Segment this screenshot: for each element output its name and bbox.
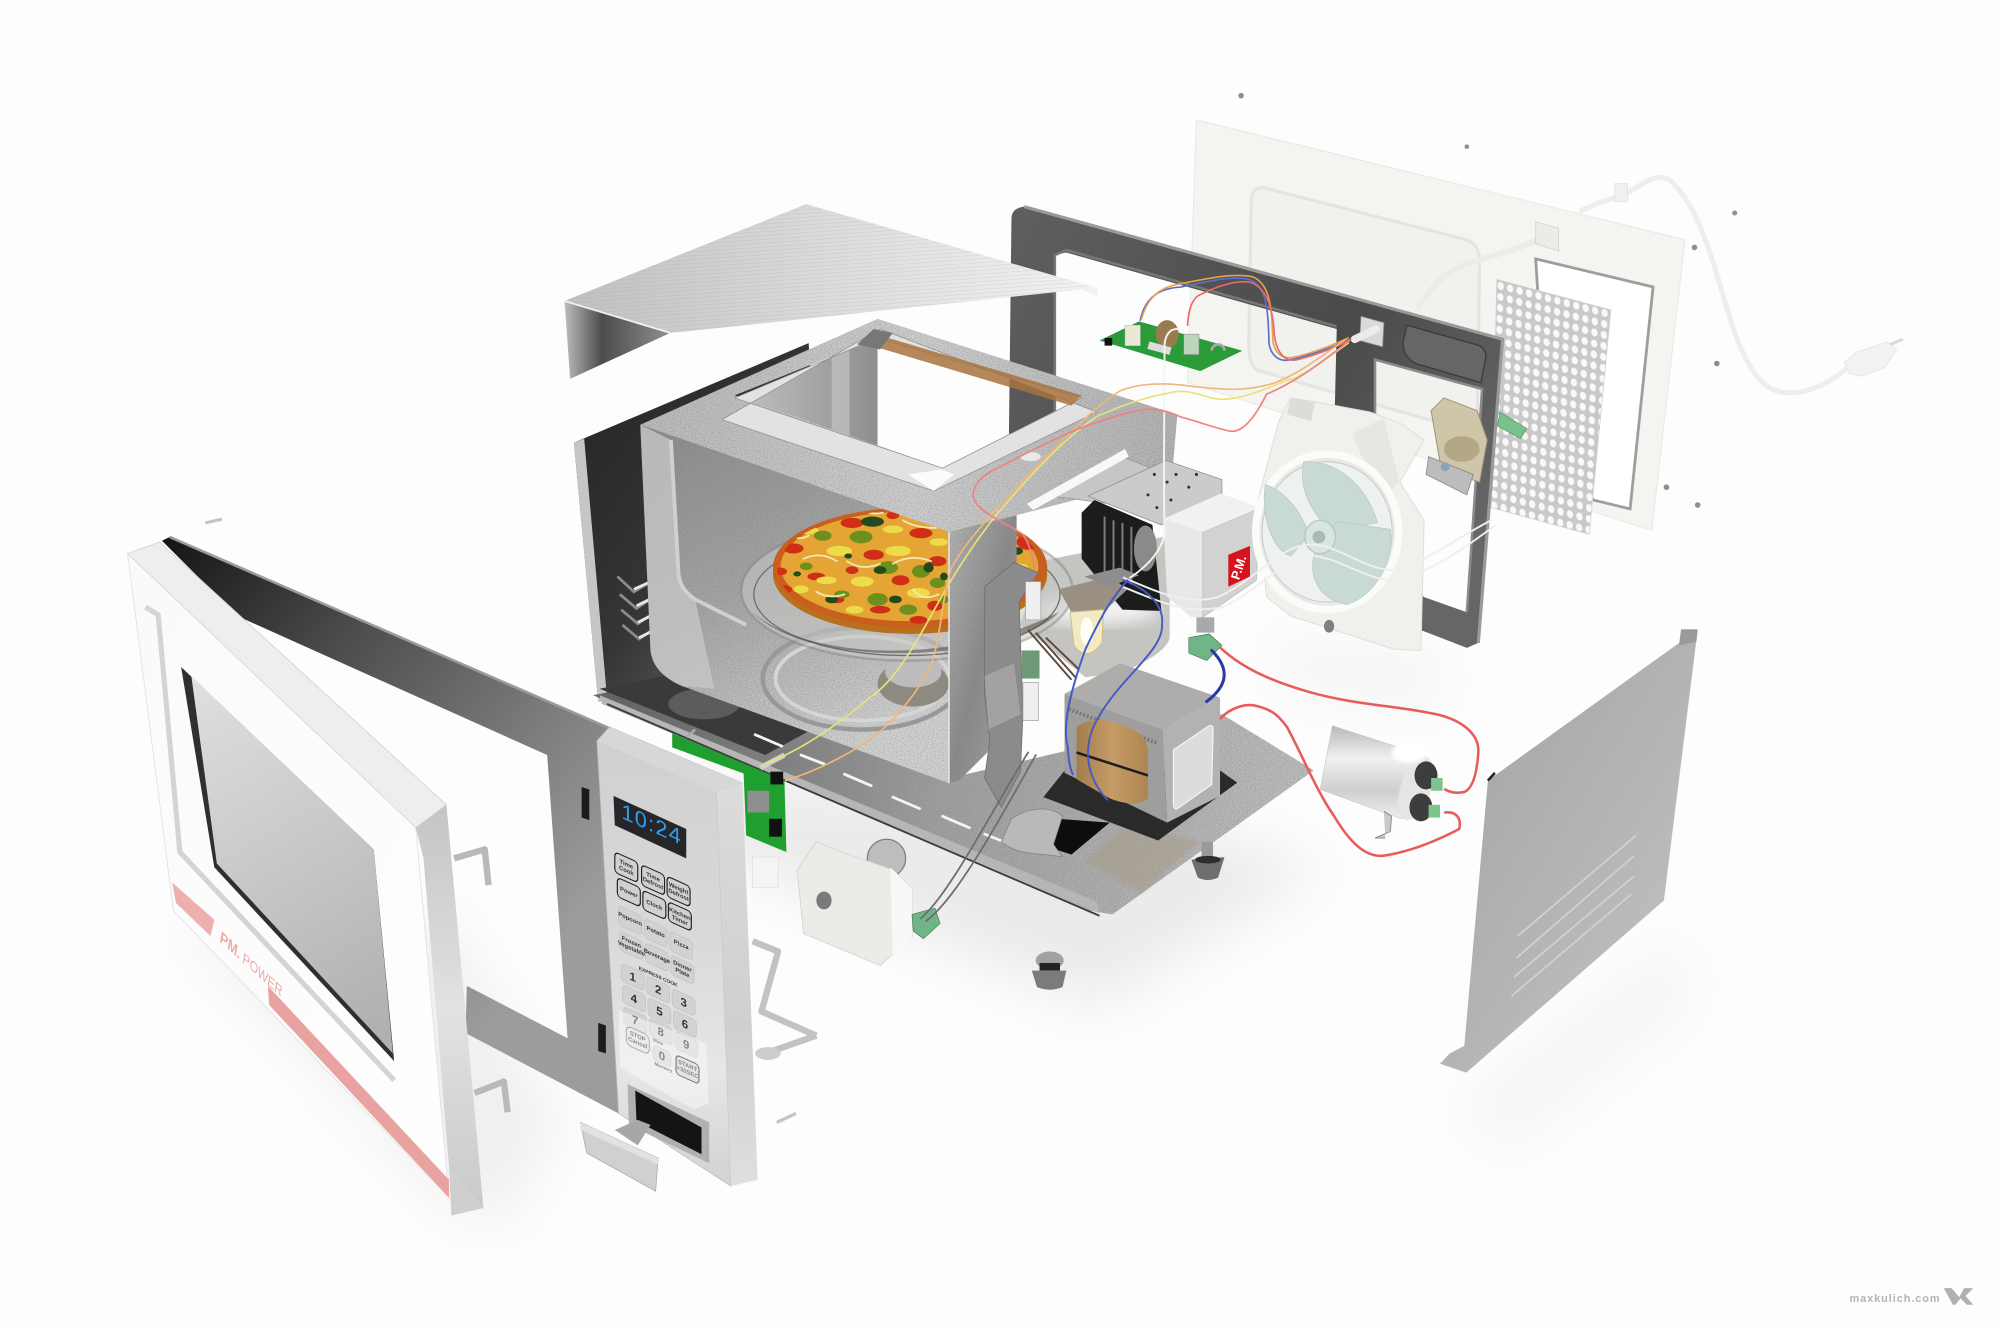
cabinet rear wall — [574, 343, 829, 701]
panel vent ribs — [1511, 835, 1636, 996]
embossed recess — [1249, 187, 1480, 434]
motor connector — [912, 908, 940, 939]
keypad: 8 — [658, 1024, 664, 1040]
tray slots — [755, 735, 1010, 844]
power cord and plug — [1418, 177, 1903, 393]
oven lamp — [1059, 568, 1139, 654]
keypad: Time — [619, 858, 634, 871]
thermal fuse — [1015, 452, 1048, 467]
feet — [1032, 842, 1224, 990]
door pink bands — [172, 883, 214, 936]
keypad: Kitchen — [669, 906, 691, 923]
fan shroud — [1256, 398, 1424, 650]
motor connector — [1497, 412, 1527, 439]
door window — [181, 667, 394, 1061]
fan motor — [1426, 398, 1527, 495]
keypad: Time — [646, 871, 660, 884]
keypad: Popcorn — [618, 911, 642, 928]
control panel — [580, 727, 758, 1191]
keypad: Clock — [646, 898, 663, 913]
keypad: Beverage — [644, 947, 671, 966]
door front — [128, 542, 483, 1215]
watermark — [1849, 1288, 1973, 1305]
cord grommet — [1360, 316, 1384, 347]
door logo: PM. — [219, 928, 242, 963]
vent window — [1536, 259, 1653, 509]
keypad: Mute — [653, 1037, 664, 1047]
wall vent slots — [617, 576, 652, 639]
keypad — [615, 852, 699, 1084]
door window bevel — [145, 607, 394, 1080]
perforated mesh — [1491, 279, 1611, 534]
door logo: POWER — [242, 949, 284, 1000]
control circuit board — [672, 730, 786, 852]
door handle opening — [628, 1084, 709, 1163]
keypad: Power — [620, 885, 638, 900]
digital time readout: 10:24 — [621, 798, 682, 850]
turntable roller ring — [763, 628, 962, 730]
watermark: maxkulich.com — [1849, 1293, 1941, 1305]
cavity interior seen through top opening — [730, 335, 938, 491]
keypad: Weight — [669, 881, 688, 897]
keypad: Potato — [647, 925, 665, 940]
right cavity wall — [1020, 536, 1170, 677]
top cover sheet — [564, 204, 1098, 379]
door frame back plate — [162, 537, 619, 1113]
rear chassis frame — [1009, 207, 1503, 648]
door latch slots — [582, 787, 589, 820]
cavity front metal strip — [949, 515, 1017, 783]
keypad: Defrost — [668, 887, 689, 903]
peeling overlay film — [619, 1010, 709, 1110]
keypad: STOP — [630, 1030, 646, 1044]
frame vent recess — [1403, 325, 1486, 383]
keypad: Timer — [672, 914, 688, 928]
floor shadows — [179, 638, 1696, 1224]
interlock bracket and switches — [985, 562, 1079, 807]
keypad: 1 — [629, 969, 636, 985]
display — [614, 796, 686, 858]
keypad: Defrost — [643, 876, 663, 892]
fan ring — [1256, 454, 1399, 610]
white wires — [1122, 329, 1495, 609]
magnetron — [1082, 460, 1260, 661]
keypad: 9 — [683, 1036, 690, 1053]
long yellow, orange and red wires — [764, 339, 1349, 781]
cavity top plate — [640, 319, 1177, 532]
crank rod and screws — [205, 519, 816, 1122]
magnetron housing — [1163, 494, 1260, 617]
transformer — [1043, 663, 1237, 841]
door latch hooks — [454, 849, 508, 1112]
keypad: Cook — [619, 864, 634, 878]
keypad: Vegetable — [618, 939, 646, 958]
magnetron connector — [1189, 617, 1222, 661]
copper coil — [1077, 720, 1148, 804]
tray opening — [1023, 816, 1110, 855]
door logo — [219, 928, 284, 1001]
keypad: Pizza — [674, 938, 689, 952]
capacitor — [1320, 726, 1443, 838]
base tray — [593, 676, 1314, 916]
keypad: Cancel — [628, 1035, 648, 1051]
keypad: 6 — [682, 1016, 688, 1032]
keypad: Frozen — [622, 935, 641, 950]
door side edge — [416, 805, 483, 1215]
magnetron: P.M. — [1228, 553, 1249, 581]
keypad: Memory — [654, 1061, 672, 1075]
keypad: 2 — [655, 982, 662, 998]
keypad: EXPRESS COOK — [639, 966, 678, 989]
keypad: START — [678, 1058, 697, 1074]
cavity left wall — [640, 425, 949, 783]
keypad: Plate — [675, 967, 690, 980]
pizza — [773, 508, 1047, 634]
filter circuit board — [1099, 320, 1242, 371]
transformer power wires — [1207, 648, 1478, 856]
back cover panel — [1188, 120, 1685, 534]
keypad: 0 — [659, 1048, 665, 1064]
door handle — [580, 1120, 658, 1191]
keypad: +30SEC — [677, 1064, 699, 1081]
control panel side — [717, 783, 758, 1186]
fan blades — [1264, 462, 1391, 605]
keypad: 3 — [680, 994, 687, 1011]
low-voltage grey wires — [921, 753, 1036, 921]
glass turntable plate — [741, 520, 1073, 661]
keypad: Dinner — [673, 959, 692, 974]
magnetron blue wires — [1066, 580, 1162, 800]
right side panel — [1440, 629, 1698, 1073]
top plate opening bevel — [722, 329, 1097, 491]
keypad: 4 — [631, 991, 637, 1007]
watermark logo — [1944, 1288, 1973, 1305]
loose screws — [1238, 93, 1737, 508]
keypad: 7 — [632, 1012, 639, 1029]
keypad: 5 — [656, 1003, 663, 1020]
blue, red and orange filter wires — [1140, 275, 1351, 360]
turntable motor — [753, 839, 940, 966]
